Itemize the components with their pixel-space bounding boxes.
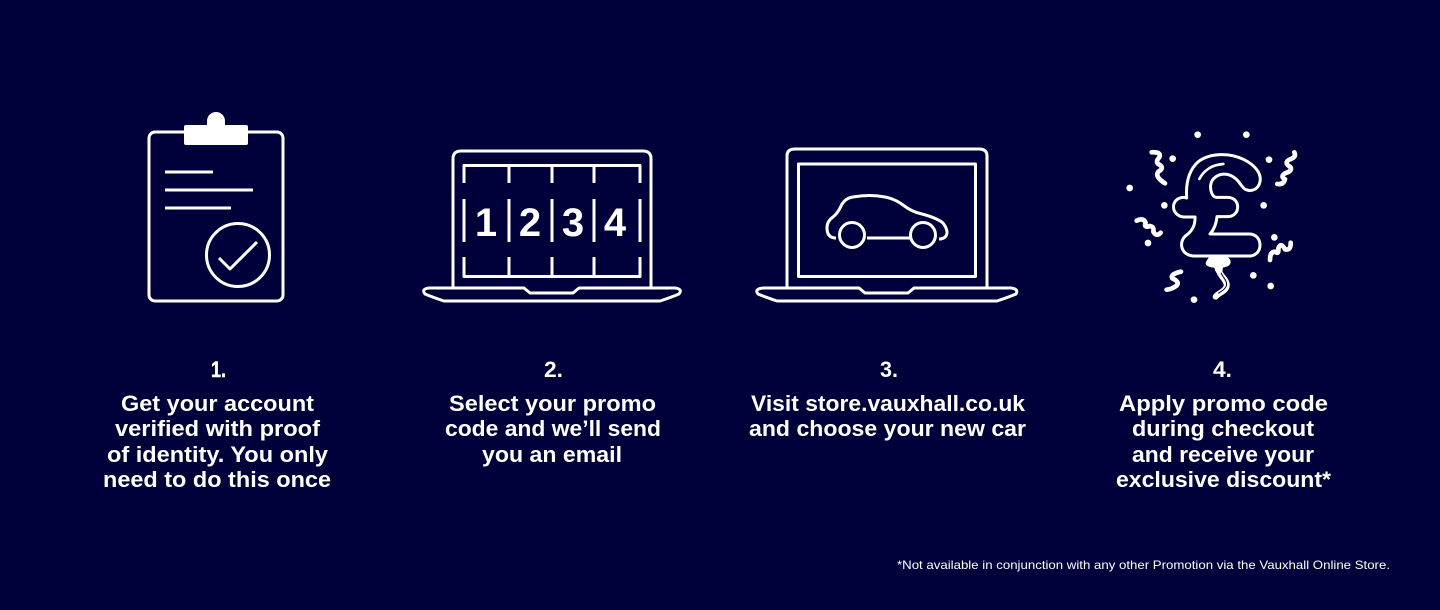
text: step 3 description: and choose your new car xyxy=(749,416,1026,441)
icon: confetti dots xyxy=(1126,131,1278,303)
icon: car outline xyxy=(827,196,947,248)
text: step 3 description xyxy=(749,391,1026,441)
footnote: *Not available in conjunction with any other Promotion via the Vauxhall Online Store. xyxy=(897,558,1390,572)
text: step 2 description: Select your promo xyxy=(449,391,656,416)
icon: confetti squiggles xyxy=(1137,152,1295,290)
text: step 1 description: Get your account xyxy=(121,391,315,416)
text: step 2 description xyxy=(445,391,661,467)
icon: laptop showing car xyxy=(757,149,1017,301)
icon: laptop showing code boxes 1 2 3 4: 4 xyxy=(604,201,627,245)
text: step 1 description: need to do this once xyxy=(103,467,331,492)
text: step 4 description: during checkout xyxy=(1132,416,1315,441)
text: step 1 description xyxy=(103,391,331,492)
text: step 1 description: verified with proof xyxy=(115,416,321,441)
text: step 1 number: 1. xyxy=(211,357,226,382)
icon: laptop showing code boxes 1 2 3 4: 3 xyxy=(562,201,584,245)
text: step 4 number: 4. xyxy=(1213,357,1232,382)
text: step 2 number: 2. xyxy=(544,357,563,382)
text: step 1 description: of identity. You only xyxy=(107,442,329,467)
text: step 4 description: exclusive discount* xyxy=(1116,467,1331,492)
text: step 2 description: you an email xyxy=(482,442,622,467)
icon: laptop showing code boxes 1 2 3 4: 2 xyxy=(519,201,541,245)
text: step 4 description xyxy=(1116,391,1331,492)
panel: step 4 xyxy=(1116,131,1331,492)
icon: laptop showing code boxes 1 2 3 4 xyxy=(424,151,680,301)
panel: step 2 xyxy=(424,151,680,467)
text: step 3 number: 3. xyxy=(880,357,898,382)
icon: pound balloon xyxy=(1173,155,1260,297)
icon: laptop showing code boxes 1 2 3 4: 1 xyxy=(475,201,497,245)
text: step 4 description: and receive your xyxy=(1132,442,1314,467)
panel: step 3 xyxy=(749,149,1026,441)
panel: step 1 xyxy=(103,112,331,492)
icon: clipboard with check mark xyxy=(149,112,283,301)
text: step 2 description: code and we’ll send xyxy=(445,416,661,441)
text: step 4 description: Apply promo code xyxy=(1119,391,1328,416)
icon: pound balloon with confetti xyxy=(1126,131,1295,303)
text: step 3 description: Visit store.vauxhall.co.uk xyxy=(751,391,1025,416)
